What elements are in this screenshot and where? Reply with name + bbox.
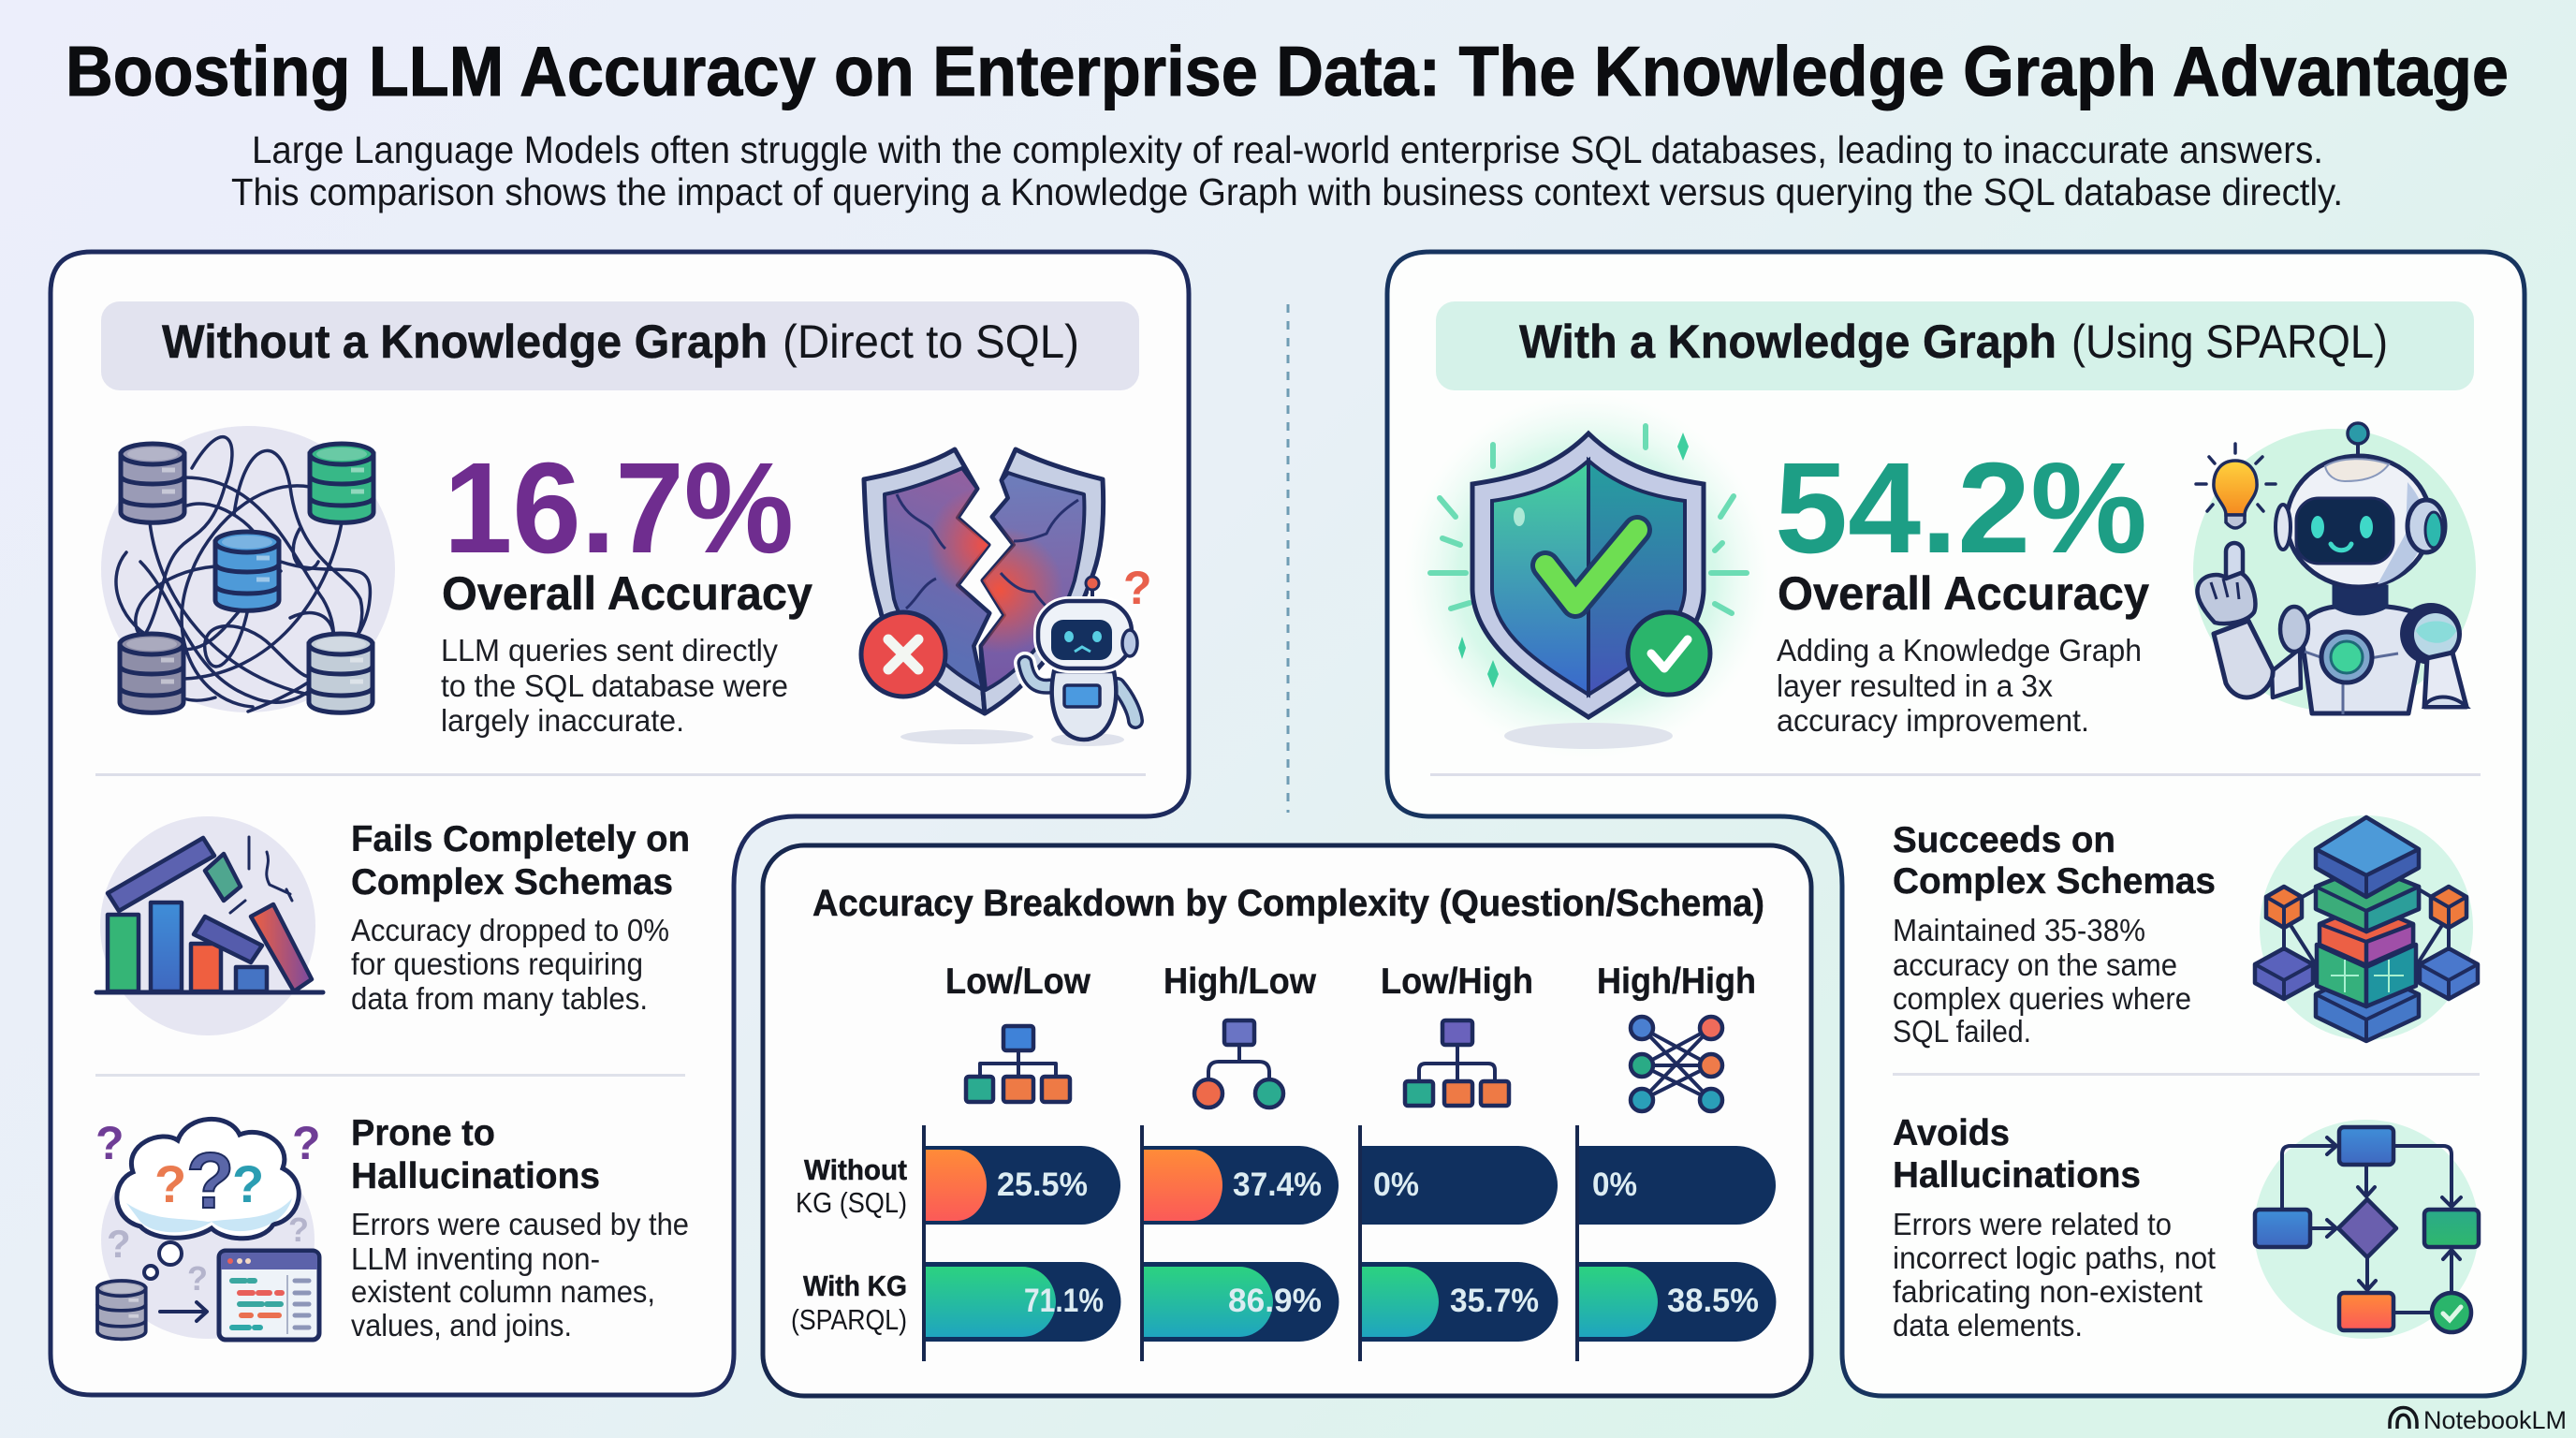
- panel heading: direct to SQL: Without a Knowledge Graph: [162, 315, 768, 368]
- bar group: low/high: [1360, 1125, 1558, 1361]
- bar group: low/high: 0%: [1373, 1167, 1419, 1203]
- stat description: layer resulted in a 3x: [1777, 668, 2053, 703]
- point: succeeds on complex schemas: Complex Schemas: [1893, 861, 2216, 902]
- bar group: low/low: [924, 1125, 1120, 1361]
- bar group: high/high: [1577, 1125, 1776, 1361]
- icon: low/high schema: [1405, 1020, 1509, 1106]
- point: fails on complex schemas: data from many tables.: [351, 981, 648, 1016]
- point: succeeds on complex schemas: accuracy on the same: [1893, 947, 2177, 982]
- point: prone to hallucinations: LLM inventing non-: [351, 1241, 600, 1276]
- bar group: low/low: 71.1%: [1024, 1283, 1104, 1319]
- column headings: High/Low: [1164, 961, 1317, 1002]
- point: avoids hallucinations: [1893, 1113, 2216, 1343]
- point: fails on complex schemas: Accuracy dropped to 0%: [351, 913, 669, 947]
- row labels: [791, 1153, 907, 1336]
- stat description: largely inaccurate.: [441, 703, 684, 738]
- panel heading: using SPARQL: [1436, 301, 2474, 390]
- icon: broken shield with confused robot: ?: [1123, 562, 1152, 614]
- row labels: KG (SQL): [796, 1186, 907, 1219]
- bar group: high/low: 86.9%: [1228, 1283, 1322, 1319]
- icon: high/low schema: [1194, 1020, 1283, 1108]
- point: succeeds on complex schemas: Maintained 35-38%: [1893, 913, 2145, 947]
- icon: hallucination cloud: ?: [288, 1211, 309, 1249]
- point: avoids hallucinations: incorrect logic paths, not: [1893, 1240, 2216, 1275]
- panel: accuracy breakdown by complexity: [763, 845, 1811, 1396]
- point: avoids hallucinations: Hallucinations: [1893, 1155, 2141, 1196]
- point: prone to hallucinations: Prone to: [351, 1113, 495, 1153]
- bar group: low/high: 35.7%: [1450, 1283, 1539, 1319]
- point: prone to hallucinations: existent column names,: [351, 1274, 655, 1309]
- icon: high/high schema: [1631, 1017, 1722, 1111]
- point: fails on complex schemas: Complex Schemas: [351, 862, 673, 902]
- icon: hallucination cloud: ?: [154, 1154, 186, 1213]
- stat description: Adding a Knowledge Graph: [1777, 633, 2142, 668]
- row labels: (SPARQL): [791, 1303, 907, 1336]
- point: avoids hallucinations: data elements.: [1893, 1308, 2083, 1343]
- divider: [95, 773, 1146, 776]
- point: prone to hallucinations: Hallucinations: [351, 1156, 600, 1196]
- column headings: Low/High: [1381, 961, 1533, 1002]
- stat: 16.7%: 16.7%: [444, 436, 794, 580]
- point: prone to hallucinations: [351, 1113, 689, 1343]
- bar group: low/low: 25.5%: [997, 1167, 1088, 1203]
- point: avoids hallucinations: Avoids: [1893, 1113, 2010, 1153]
- icon: hallucination cloud: ?: [292, 1117, 321, 1169]
- bar group: high/low: 37.4%: [1233, 1167, 1322, 1203]
- icon: tangled databases: [101, 426, 395, 712]
- stat description: to the SQL database were: [441, 668, 788, 703]
- icon: collapsing bars: [96, 816, 323, 1035]
- bar group: high/high: 38.5%: [1667, 1283, 1759, 1319]
- stat description: LLM queries sent directly: [441, 633, 778, 668]
- stat label: Overall Accuracy: [442, 567, 812, 620]
- icon: hallucination cloud: ?: [186, 1137, 234, 1225]
- point: succeeds on complex schemas: [1893, 820, 2216, 1049]
- panel: without a knowledge graph: [51, 252, 1189, 1395]
- column headings: High/High: [1597, 961, 1756, 1002]
- subtitle: Large Language Models often struggle with the complexity of real-world enterprise SQL databases, leading to inaccurate answers.: [252, 128, 2323, 171]
- panel heading: direct to SQL: (Direct to SQL): [783, 315, 1079, 368]
- bar group: high/high: 0%: [1592, 1167, 1637, 1203]
- icon: robot with light bulb: [2193, 423, 2476, 714]
- icon: logic flow chart: [2254, 1120, 2479, 1339]
- NotebookLM logo: NotebookLM: [2423, 1406, 2567, 1434]
- column headings: [945, 961, 1756, 1002]
- subtitle: [231, 128, 2343, 213]
- divider: [95, 1074, 685, 1077]
- stat label: Overall Accuracy: [1778, 567, 2149, 620]
- icon: layered graph stack: [2255, 815, 2478, 1041]
- icon: broken shield with confused robot: [861, 449, 1152, 746]
- point: fails on complex schemas: [351, 819, 690, 1016]
- panel heading: using SPARQL: With a Knowledge Graph: [1519, 315, 2056, 368]
- panel: with a knowledge graph: [1387, 252, 2525, 1396]
- icon: hallucination cloud: ?: [232, 1154, 264, 1213]
- stat description: [1777, 633, 2142, 738]
- divider: [1430, 773, 2481, 776]
- point: succeeds on complex schemas: Succeeds on: [1893, 820, 2115, 860]
- icon: hallucination cloud: ?: [187, 1259, 208, 1298]
- icon: glowing shield with check: [1404, 393, 1769, 758]
- subtitle: This comparison shows the impact of querying a Knowledge Graph with business context versus querying the SQL database directly.: [231, 170, 2343, 213]
- icon: hallucination cloud: ?: [95, 1117, 124, 1169]
- bar group: high/low: [1142, 1125, 1339, 1361]
- panel heading: direct to SQL: [101, 301, 1139, 390]
- point: fails on complex schemas: Fails Completely on: [351, 819, 690, 859]
- point: succeeds on complex schemas: complex queries where: [1893, 981, 2191, 1016]
- icon: hallucination cloud: [95, 1117, 321, 1340]
- row labels: Without: [804, 1153, 907, 1186]
- icon: hallucination cloud: ?: [107, 1222, 131, 1266]
- icon: low/low schema: [966, 1026, 1070, 1102]
- dashed centre divider: [1286, 304, 1290, 813]
- point: fails on complex schemas: for questions requiring: [351, 946, 643, 981]
- divider: [1893, 1073, 2480, 1076]
- chart title: Accuracy Breakdown by Complexity (Question/Schema): [812, 883, 1764, 924]
- point: avoids hallucinations: Errors were related to: [1893, 1207, 2172, 1241]
- stat description: [441, 633, 788, 738]
- point: prone to hallucinations: Errors were caused by the: [351, 1207, 689, 1241]
- panel heading: using SPARQL: (Using SPARQL): [2071, 315, 2388, 368]
- stat description: accuracy improvement.: [1777, 703, 2089, 738]
- stat: 54.2%: 54.2%: [1775, 436, 2147, 580]
- point: avoids hallucinations: fabricating non-existent: [1893, 1274, 2203, 1309]
- row labels: With KG: [803, 1269, 907, 1302]
- column headings: Low/Low: [945, 961, 1091, 1002]
- point: prone to hallucinations: values, and joins.: [351, 1308, 572, 1343]
- point: succeeds on complex schemas: SQL failed.: [1893, 1014, 2031, 1049]
